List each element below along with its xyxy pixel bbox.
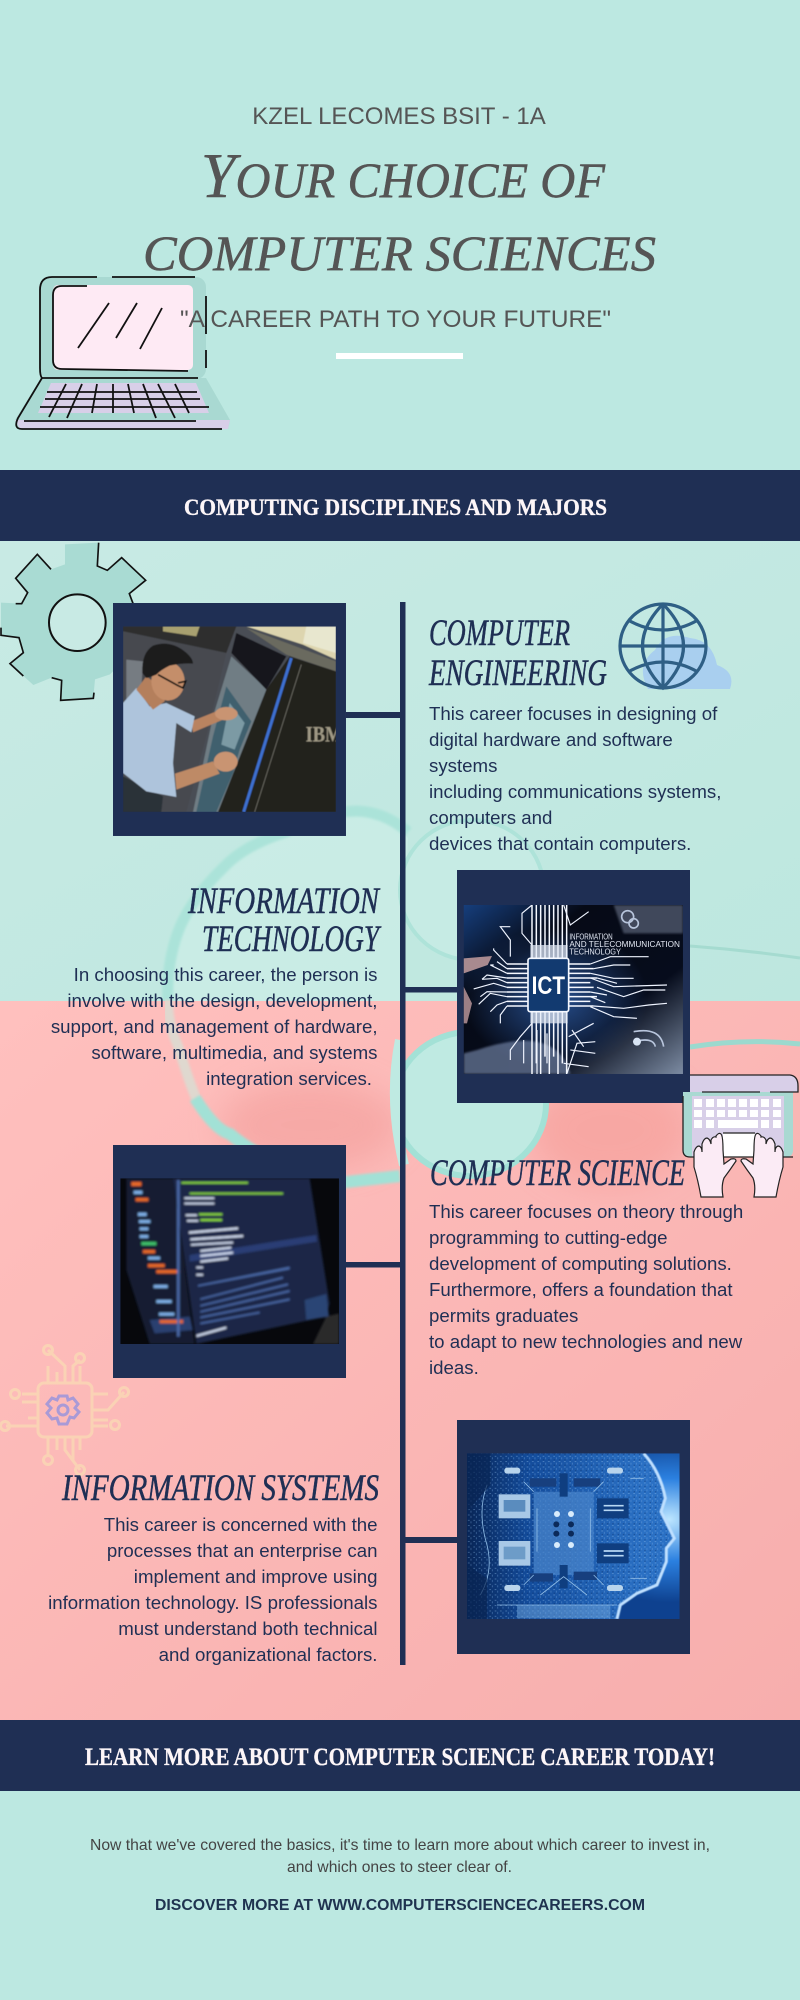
text: information systems: must understand both technical (118, 1618, 378, 1639)
text: computer science: development of computing solutions. (429, 1253, 732, 1274)
text: information technology (51, 964, 378, 1089)
connector 2 (405, 987, 457, 992)
text: computer science: programming to cutting-edge (429, 1227, 668, 1248)
icon: gear (1, 543, 146, 700)
text: computer engineering: systems (429, 755, 497, 776)
footer text (90, 1837, 710, 1876)
text: computer science (429, 1201, 743, 1378)
photo card: ICT: AND TELECOMMUNICATION (569, 939, 680, 949)
icon: laptop (15, 277, 230, 429)
tagline: "A CAREER PATH TO YOUR FUTURE" (180, 306, 611, 333)
text: computer science: to adapt to new technologies and new (429, 1331, 743, 1352)
main title: COMPUTER SCIENCES (143, 225, 656, 281)
heading: computer engineering (428, 613, 607, 694)
text: information systems: information technology. IS professionals (48, 1592, 378, 1613)
main title (143, 140, 656, 281)
text: information technology: support, and management of hardware, (51, 1016, 378, 1037)
top background (0, 0, 800, 470)
footer background (0, 1791, 800, 2000)
band: computing disciplines (0, 470, 800, 541)
text: computer engineering: devices that contain computers. (429, 833, 691, 854)
icon: laptop with typing hands (683, 1075, 798, 1197)
footer text: Now that we've covered the basics, it's time to learn more about which career to invest in, (90, 1837, 710, 1854)
icon: chip with gear (0, 1346, 128, 1474)
text: computer engineering: This career focuses in designing of (429, 703, 718, 724)
photo card: ICT: TECHNOLOGY (569, 947, 621, 957)
pink section background (0, 1001, 800, 1720)
subtitle: author line: KZEL LECOMES BSIT - 1A (252, 103, 546, 130)
background photo: glass loops (168, 811, 800, 1185)
text: computer science: This career focuses on theory through (429, 1201, 743, 1222)
text: information technology: involve with the design, development, (67, 990, 378, 1011)
connector 3 (346, 1262, 400, 1268)
heading: computer science: COMPUTER SCIENCE (430, 1153, 685, 1194)
text: information technology: software, multimedia, and systems (91, 1042, 378, 1063)
band: learn more (0, 1720, 800, 1791)
heading: information technology (187, 881, 382, 960)
text: information systems: This career is concerned with the (104, 1514, 378, 1535)
main title: YOUR CHOICE OF (201, 140, 605, 211)
band: computing disciplines: COMPUTING DISCIPLINES AND MAJORS (184, 495, 607, 520)
connector 1 (346, 712, 400, 718)
timeline spine (400, 602, 406, 1665)
photo card: ICT: INFORMATION (569, 931, 613, 941)
text: computer engineering: including communications systems, (429, 781, 721, 802)
white divider bar (336, 353, 463, 359)
teal section background (0, 541, 800, 1001)
text: computer science: ideas. (429, 1357, 479, 1378)
heading: information systems: INFORMATION SYSTEMS (61, 1468, 379, 1509)
connector 4 (405, 1537, 457, 1543)
photo card: code screen (113, 1145, 346, 1378)
text: information systems (48, 1514, 378, 1665)
text: computer engineering (429, 703, 721, 854)
photo card: computer engineering (113, 603, 346, 836)
text: computer engineering: computers and (429, 807, 552, 828)
text: information systems: implement and improve using (134, 1566, 378, 1587)
text: information systems: and organizational factors. (159, 1644, 378, 1665)
footer text: and which ones to steer clear of. (287, 1859, 512, 1876)
text: information technology: integration services. (206, 1068, 372, 1089)
heading: information technology: TECHNOLOGY (202, 919, 382, 960)
photo card: computer engineering: IBM (306, 722, 342, 747)
text: computer engineering: digital hardware and software (429, 729, 673, 750)
icon: globe and cloud (620, 604, 731, 689)
heading: computer engineering: COMPUTER (429, 613, 570, 654)
text: computer science: Furthermore, offers a foundation that (429, 1279, 733, 1300)
photo card: ICT (457, 870, 690, 1103)
photo card: AI head circuit (457, 1420, 690, 1654)
text: computer science: permits graduates (429, 1305, 578, 1326)
photo card: ICT: ICT (532, 972, 565, 1000)
text: information technology: In choosing this career, the person is (74, 964, 378, 985)
footer link: DISCOVER MORE AT WWW.COMPUTERSCIENCECAREERS.COM (155, 1897, 645, 1914)
text: information systems: processes that an enterprise can (107, 1540, 378, 1561)
heading: information technology: INFORMATION (187, 881, 381, 922)
heading: computer engineering: ENGINEERING (428, 653, 607, 694)
